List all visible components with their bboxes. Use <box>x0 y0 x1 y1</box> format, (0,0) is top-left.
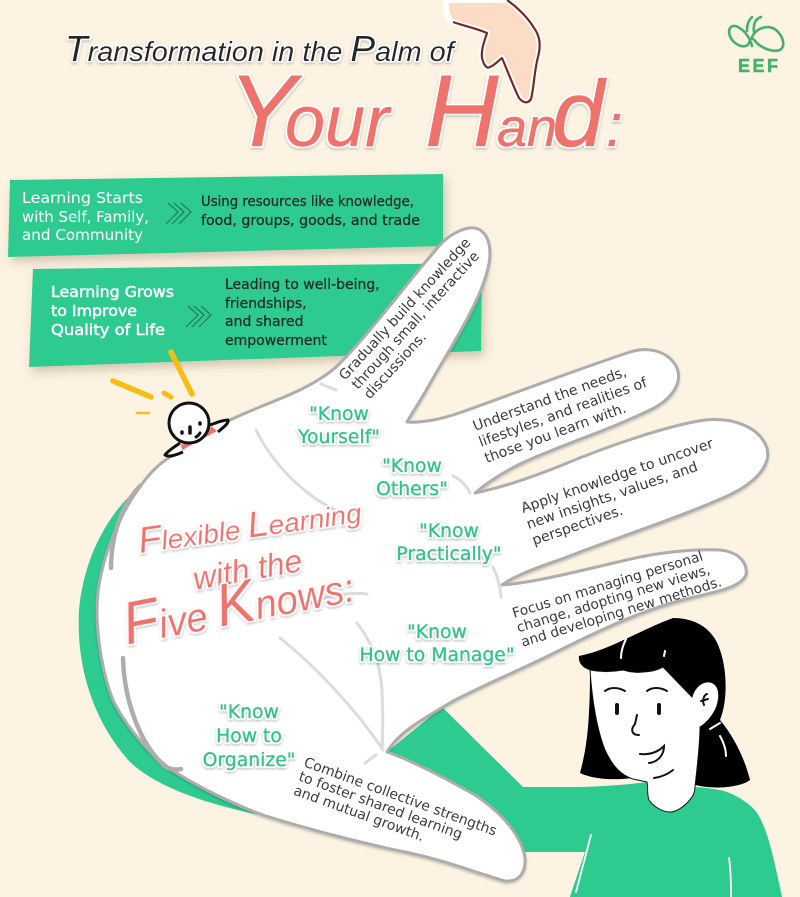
label: know how to organize: "Know <box>219 702 279 723</box>
icon: surprise marks <box>113 352 192 413</box>
middle finger text: new insights, values, and <box>525 459 700 533</box>
label: know yourself: Yourself" <box>297 427 380 448</box>
icon: chevrons <box>166 203 191 224</box>
index finger text: Understand the needs, <box>471 364 629 435</box>
title main: Your Hand:: : <box>606 92 623 159</box>
banner: learning starts: Learning Starts <box>22 189 143 207</box>
banner: learning grows: empowerment <box>225 333 327 349</box>
heading: flexible learning <box>117 490 364 658</box>
middle finger text: Apply knowledge to uncover <box>519 436 716 517</box>
heading: flexible learning: Flexible Learning <box>135 490 364 561</box>
banner: learning grows: Quality of Life <box>51 321 165 339</box>
banner: learning grows: friendships, <box>225 296 307 312</box>
heading: flexible learning: Five Knows: <box>117 548 359 658</box>
little finger text: to foster shared learning <box>297 769 464 843</box>
icon: chevrons <box>186 306 211 327</box>
label: know how to manage: How to Manage" <box>359 645 515 666</box>
banner: learning grows: Learning Grows <box>51 283 174 301</box>
hand <box>97 228 768 881</box>
banner: learning grows: and shared <box>225 314 303 330</box>
banner: learning starts: with Self, Family, <box>22 208 149 226</box>
banner: learning grows: Leading to well-being, <box>225 277 380 293</box>
person shirt shoulder <box>523 782 782 897</box>
title main: Your Hand:: our <box>285 82 392 162</box>
thumb text: Gradually build knowledge <box>336 235 474 384</box>
ring finger text: and developing new methods. <box>519 574 724 651</box>
banner: learning grows <box>29 263 482 367</box>
character peeking <box>165 403 228 456</box>
banner: learning starts: and Community <box>22 226 143 244</box>
icon: pointing hand outline <box>453 0 540 102</box>
title main: Your Hand:: H <box>425 54 499 168</box>
label: know others: Others" <box>376 479 448 500</box>
banner: learning starts <box>8 174 443 257</box>
label: know how to organize: How to <box>216 726 282 747</box>
hair highlights <box>621 639 726 756</box>
person body: green shirt and arm <box>79 485 782 897</box>
little finger text: and mutual growth. <box>291 783 426 845</box>
label: know others: "Know <box>382 456 442 477</box>
palm creases <box>256 384 501 763</box>
label: know yourself: "Know <box>309 404 369 425</box>
thumb text: discussions. <box>361 329 430 402</box>
shirt highlights <box>576 835 731 897</box>
banner: learning starts: food, groups, goods, and trade <box>201 213 420 229</box>
title main: Your Hand:: Y <box>228 54 303 168</box>
little finger text: Combine collective strengths <box>302 755 499 840</box>
face details <box>605 688 708 778</box>
title line: Transformation in the Palm of: Transformation in the Palm of <box>65 28 457 69</box>
index finger text: lifestyles, and realities of <box>477 375 650 451</box>
banner: learning starts: Using resources like knowledge, <box>201 194 414 210</box>
title main: Your Hand:: an <box>497 98 557 158</box>
label: know how to manage: "Know <box>407 622 467 643</box>
thumb text: through small, interactive <box>349 249 483 393</box>
ring finger text: change, adopting new views, <box>515 562 712 636</box>
label: know practically: Practically" <box>396 544 502 565</box>
heading: flexible learning: with the <box>190 542 305 597</box>
label: know practically: "Know <box>419 521 479 542</box>
person hair <box>579 618 750 787</box>
title main: Your Hand:: d <box>552 61 607 166</box>
logo: EEF: EEF <box>738 56 778 76</box>
logo: EEF <box>729 17 783 76</box>
index finger text: those you learn with. <box>483 401 628 467</box>
person face and neck <box>590 667 719 812</box>
hand side creases <box>111 486 181 770</box>
label: know how to organize: Organize" <box>203 750 295 771</box>
middle finger text: perspectives. <box>530 503 625 549</box>
icon: pointing hand <box>446 0 540 102</box>
ring finger text: Focus on managing personal <box>510 548 705 622</box>
banner: learning grows: to Improve <box>51 302 137 320</box>
